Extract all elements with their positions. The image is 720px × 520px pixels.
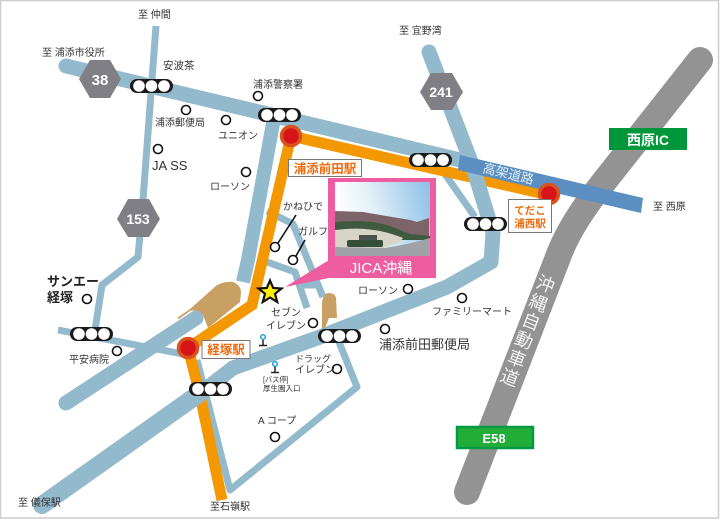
elevated road xyxy=(458,155,643,213)
map labels: 至 浦添市役所 xyxy=(42,46,105,59)
map labels: 安波茶 xyxy=(163,59,195,72)
map labels: 至 西原 xyxy=(653,201,686,213)
expressway: Okinawa Expressway xyxy=(467,60,700,492)
minor roads xyxy=(58,26,475,490)
traffic signals xyxy=(70,79,507,396)
highway sign: E58 xyxy=(457,427,533,448)
map labels: ローソン xyxy=(210,182,250,193)
map labels: ファミリーマート xyxy=(432,307,512,318)
landmark markers xyxy=(82,92,466,442)
highway sign: Nishihara IC xyxy=(609,128,687,150)
station label: Urasoe-Maeda: 浦添前田駅 xyxy=(294,161,357,176)
elevated road: 高架道路 xyxy=(481,160,535,187)
map labels: [バス停] xyxy=(263,375,289,384)
map labels: A コープ xyxy=(258,415,296,427)
map labels: セブン xyxy=(271,306,301,319)
tunnel: Kyozuka xyxy=(177,282,241,328)
map labels: 浦添警察署 xyxy=(253,78,303,91)
map labels: ユニオン xyxy=(218,130,258,142)
map labels: ガルフ xyxy=(298,226,328,238)
map labels: サンエー xyxy=(47,274,99,289)
bus stop markers xyxy=(259,335,279,372)
map labels: 厚生園入口 xyxy=(263,383,300,393)
map labels: かねひで xyxy=(283,201,323,213)
station label: Tedako-Uranishi: 浦西駅 xyxy=(514,217,546,230)
map labels: イレブン xyxy=(295,363,335,376)
tunnel: east xyxy=(322,293,337,328)
callout: JICA Okinawa xyxy=(285,178,436,287)
stations xyxy=(178,126,558,358)
map labels: 経塚 xyxy=(47,290,73,305)
railway: monorail line xyxy=(188,136,549,500)
station label: Kyozuka xyxy=(202,340,250,358)
route shield 241 xyxy=(420,73,463,110)
map labels: 浦添郵便局 xyxy=(155,116,205,129)
route shield 38 xyxy=(79,60,121,98)
route shield 38: 38 xyxy=(92,72,108,89)
station label: Tedako-Uranishi: てだこ xyxy=(514,205,546,217)
map labels: 浦添前田郵便局 xyxy=(379,337,470,352)
expressway name: 沖縄自動車道 xyxy=(496,271,557,391)
highway sign: E58: E58 xyxy=(482,431,506,446)
map labels: 平安病院 xyxy=(69,354,109,366)
map labels: イレブン xyxy=(266,319,306,332)
map labels: 至 仲間 xyxy=(138,8,171,21)
map labels: JA SS xyxy=(152,158,188,173)
route shield 153: 153 xyxy=(126,211,150,227)
map labels: ローソン xyxy=(358,286,398,297)
map labels: 至石嶺駅 xyxy=(210,501,250,513)
map labels: 至 宜野湾 xyxy=(399,24,442,37)
callout: JICA Okinawa: JICA沖縄 xyxy=(350,260,412,277)
star: JICA Okinawa location xyxy=(258,280,282,302)
photo: JICA building xyxy=(335,182,430,256)
map labels: 至 儀保駅 xyxy=(18,496,61,509)
station label: Tedako-Uranishi xyxy=(508,200,552,232)
main roads xyxy=(42,52,493,505)
station label: Kyozuka: 経塚駅 xyxy=(207,343,245,357)
map labels: ドラッグ xyxy=(295,353,331,364)
route shield 153 xyxy=(117,199,160,237)
highway sign: Nishihara IC: 西原IC xyxy=(627,132,669,148)
route shield 241: 241 xyxy=(429,84,453,100)
